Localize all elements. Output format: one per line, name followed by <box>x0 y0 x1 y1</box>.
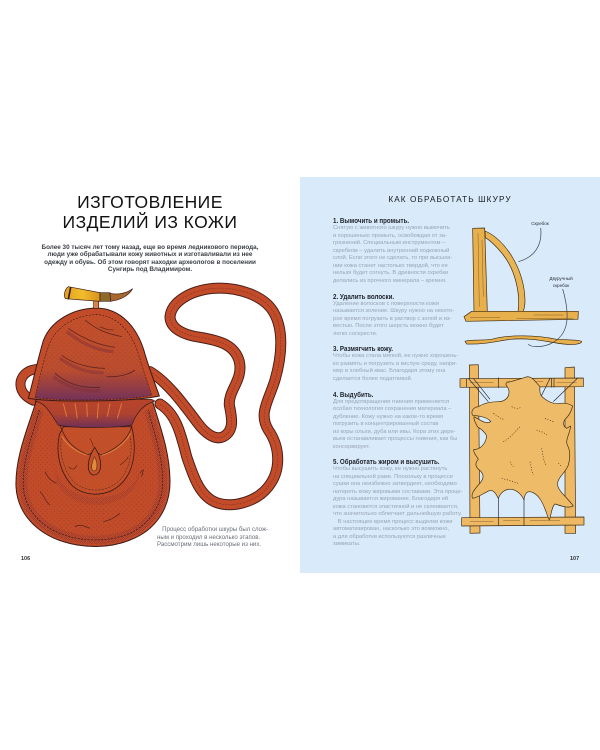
caption: Рассмотрим лишь некоторые из них. <box>157 541 261 548</box>
icon: front pocket <box>58 427 134 494</box>
intro text: Более 30 тысяч лет тому назад, еще во время ледникового периода, <box>42 244 258 250</box>
step 4 text: консервирует. <box>333 444 370 450</box>
step 4 heading: 4. Выдубить. <box>333 390 373 398</box>
step 2 text: Удаление волосков с поверхности кожи <box>333 300 439 306</box>
intro text: Сунгирь под Владимиром. <box>108 266 192 273</box>
icon: lashing cords <box>467 377 577 526</box>
icon: frame bars <box>460 378 583 387</box>
label: two-handed scraper: Двуручный <box>549 276 573 281</box>
step 4 text: вьев останавливает процессы гниения, как бы <box>333 436 457 442</box>
intro text <box>42 244 258 273</box>
step 1 text: скребком – удалить внутренний подкожный <box>333 248 449 254</box>
step 5 text: на специальной раме. Поскольку в процессе <box>333 474 453 480</box>
step 2 text: рое время погрузить в раствор с золой и из- <box>333 316 451 322</box>
icon: long strap <box>20 288 281 505</box>
step 5 heading: 5. Обработать жиром и высушить. <box>333 457 440 466</box>
step 5 text: натереть кожу жировыми составами. Эта проце- <box>333 488 463 494</box>
step 3 text: ко размять и погрузить в кислую среду, напри- <box>333 360 457 366</box>
step 5 text: автоматизирован, насколько это возможно, <box>333 526 449 532</box>
intro text: одежду и обувь. Об этом говорят находки археологов в поселении <box>44 259 256 266</box>
step 5 text: что значительно облегчает дальнейшую работу. <box>333 511 462 517</box>
label: two-handed scraper: скребок <box>553 283 569 288</box>
page number left: 106 <box>21 556 30 562</box>
step 2 text: легко соскрести. <box>333 330 377 336</box>
caption <box>157 526 268 548</box>
step 4 text: погрузить в концентрированный состав <box>333 421 438 427</box>
step 3 text: мер в хлебный квас. Благодаря этому она <box>333 368 445 374</box>
callout line: two-handed scraper <box>528 289 567 347</box>
icon: scraper arc <box>485 231 525 313</box>
icon: flap collar <box>35 399 155 475</box>
step 3 heading: 3. Размягчить кожу. <box>333 344 393 353</box>
step 2 text <box>333 300 454 336</box>
step 1 text: и хорошенько промыть, освобождая от за- <box>333 232 447 238</box>
step 1 text: Снятую с животного шкуру нужно вымочить <box>333 225 450 231</box>
step 1 text: нии кожа станет настолько твердой, что ее <box>333 262 448 268</box>
step 5 text: Чтобы высушить кожу, ее нужно растянуть <box>333 466 447 472</box>
icon: frame posts <box>469 365 480 533</box>
illustration: leather bag with strap and horn <box>16 287 281 546</box>
caption: Процесс обработки шкуры был слож- <box>162 526 268 533</box>
caption: ным и проходил в несколько этапов. <box>157 534 260 541</box>
label: scraper: Скребок <box>531 221 549 226</box>
icon: bag top flap <box>28 308 159 401</box>
icon: hide texture marks <box>493 407 562 483</box>
label: two-handed scraper <box>549 276 573 288</box>
page number right: 107 <box>570 556 579 562</box>
title: ИЗДЕЛИЙ ИЗ КОЖИ <box>63 212 237 232</box>
icon: two-handed scraper <box>465 336 582 345</box>
step 5 text <box>333 466 463 547</box>
step 1 text <box>333 225 452 284</box>
callout line: scraper <box>518 228 541 262</box>
icon: stretched hide <box>472 377 573 520</box>
step 1 text: слой. Если этого не сделать, то при высыха- <box>333 255 452 261</box>
icon: bag body <box>16 402 170 546</box>
heading: how to treat hide: КАК ОБРАБОТАТЬ ШКУРУ <box>388 195 512 204</box>
step 4 text: из коры ольхи, дуба или ивы. Кора этих дере- <box>333 428 456 434</box>
illustration: hide on frame <box>460 365 584 533</box>
title: ИЗГОТОВЛЕНИЕ <box>77 192 223 212</box>
step 3 text <box>333 352 458 382</box>
illustration: scraper on stand <box>464 228 582 345</box>
step 1 text: грязнений. Специальным инструментом – <box>333 240 445 246</box>
step 1 text: нельзя будет согнуть. В древности скребки <box>333 270 448 276</box>
panel: right page background <box>300 177 600 573</box>
icon: base board <box>464 311 578 321</box>
illustrations <box>15 228 584 547</box>
step 3 text: сделается более податливой. <box>333 376 412 382</box>
title <box>63 192 237 232</box>
step 2 text: называется золение. Шкуру нужно на некото- <box>333 308 454 314</box>
step 1 text: делались из прочного минерала – кремня. <box>333 278 447 284</box>
step 5 text: дура называется жирование. Благодаря ей <box>333 496 448 502</box>
step 5 text: химикаты. <box>333 541 360 547</box>
step 4 text: особая технология сохранения материала – <box>333 406 451 412</box>
step 5 text: В настоящее время процесс выделки кожи <box>338 518 452 524</box>
step 2 heading: 2. Удалить волоски. <box>333 292 394 300</box>
step 3 text: Чтобы кожа стала мягкой, ее нужно хорошень- <box>333 353 458 359</box>
icon: horn <box>64 287 133 308</box>
step 5 text: а для обработки используются различные <box>333 534 446 540</box>
step 2 text: вестью. После этого шерсть можно будет <box>333 323 444 329</box>
step 5 text: сушки она неизбежно затвердеет, необходимо <box>333 481 457 487</box>
step 4 text: дубление. Кожу нужно на какое-то время <box>333 414 443 420</box>
step 4 text <box>333 398 457 450</box>
step 4 text: Для предотвращения гниения применяется <box>333 398 449 404</box>
intro text: люди уже обрабатывали кожу животных и изготавливали из нее <box>48 251 252 258</box>
step 5 text: кожа становится эластичной и не склеивается, <box>333 504 458 510</box>
step 1 heading: 1. Вымочить и промыть. <box>333 216 409 225</box>
icon: post <box>473 228 487 313</box>
